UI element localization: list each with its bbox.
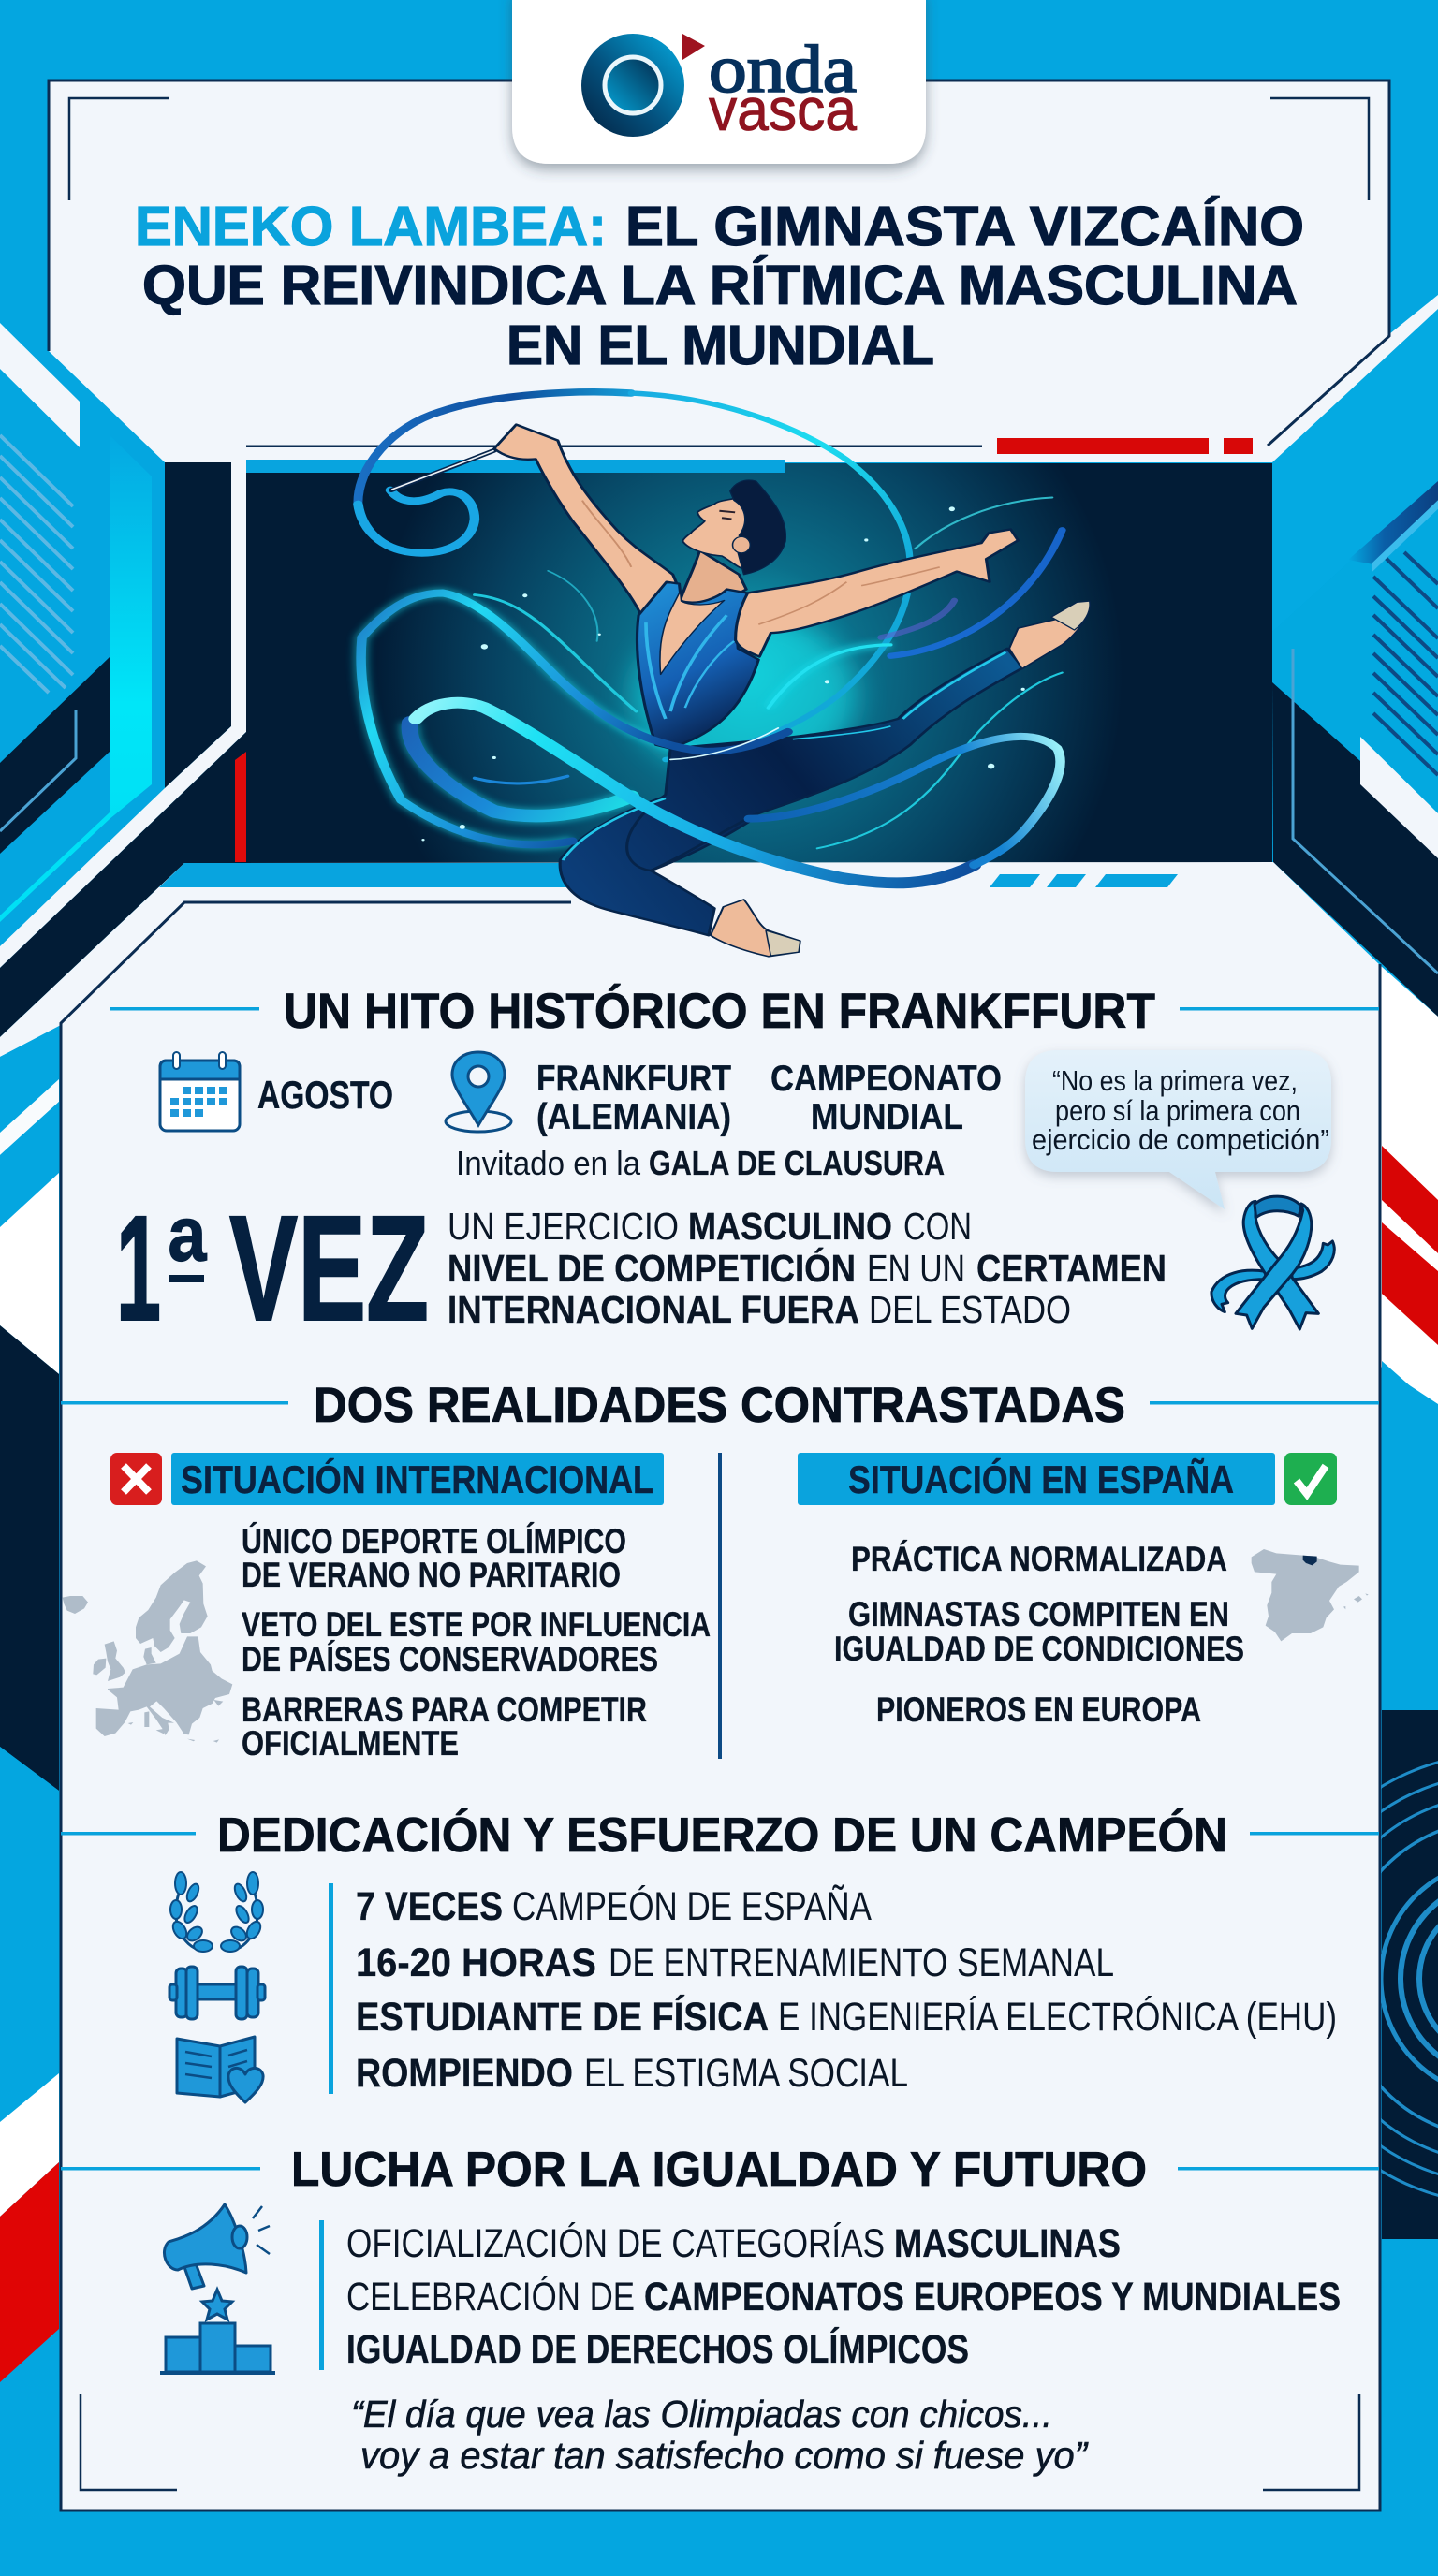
text: dedication list: DE ENTRENAMIENTO SEMANAL bbox=[609, 1940, 1114, 1985]
gymnast with ribbon bbox=[358, 392, 1090, 957]
lower content panel bbox=[0, 862, 1438, 2510]
gymnast body bbox=[494, 425, 1090, 957]
text: first time description: DEL ESTADO bbox=[869, 1288, 1071, 1331]
panel: situación en españa bbox=[798, 1453, 1369, 1729]
icon: calendar bbox=[160, 1052, 240, 1131]
icon: location pin bbox=[446, 1052, 511, 1132]
text: equality list: IGUALDAD DE DERECHOS OLÍMPICOS bbox=[346, 2327, 969, 2372]
bullet list: PRÁCTICA NORMALIZADA bbox=[851, 1540, 1227, 1578]
title: EL GIMNASTA VIZCAÍNO bbox=[625, 196, 1304, 257]
label: agosto: AGOSTO bbox=[257, 1073, 393, 1117]
heading: dos realidades: DOS REALIDADES CONTRASTADAS bbox=[314, 1378, 1125, 1433]
text: first time description: EN UN bbox=[867, 1247, 965, 1290]
callout: speech bubble: pero sí la primera con bbox=[1055, 1094, 1300, 1127]
text: equality list: MASCULINAS bbox=[894, 2221, 1121, 2266]
icon: book with heart bbox=[177, 2037, 263, 2102]
chest skin bbox=[660, 592, 725, 675]
bent leg bbox=[560, 795, 754, 935]
text: first time description: UN EJERCICIO bbox=[448, 1205, 679, 1248]
label: frankfurt: (ALEMANIA) bbox=[536, 1097, 731, 1137]
closing quote: voy a estar tan satisfecho como si fuese yo” bbox=[360, 2434, 1089, 2477]
invited line bbox=[456, 1144, 945, 1182]
bullet list bbox=[242, 1521, 711, 1763]
invited line: Invitado en la bbox=[456, 1144, 641, 1182]
hair bbox=[730, 480, 785, 575]
text: first time description: CERTAMEN bbox=[976, 1247, 1167, 1290]
label: campeonato mundial: CAMPEONATO bbox=[770, 1059, 1002, 1099]
header bar: SITUACIÓN INTERNACIONAL bbox=[181, 1456, 653, 1501]
extended leg bbox=[627, 649, 1023, 871]
ribbon: upper loop bbox=[358, 392, 1062, 848]
big number: 1ª vez: 1 bbox=[116, 1184, 161, 1352]
text: first time description: MASCULINO bbox=[688, 1205, 892, 1248]
label: campeonato mundial bbox=[770, 1059, 1002, 1137]
ribbon glow bbox=[361, 593, 890, 844]
map: europe bbox=[63, 1560, 232, 1743]
outstretched arm bbox=[736, 530, 1018, 657]
bullet list: VETO DEL ESTE POR INFLUENCIA bbox=[242, 1605, 711, 1644]
bullet list: DE PAÍSES CONSERVADORES bbox=[242, 1640, 658, 1678]
left decorative panel bbox=[0, 323, 152, 922]
right edge bands bbox=[1381, 1146, 1438, 2239]
heading: un hito histórico: UN HITO HISTÓRICO EN FRANKFFURT bbox=[284, 983, 1155, 1039]
logo card: vasca bbox=[709, 76, 857, 143]
hero dark band bbox=[0, 438, 1438, 1037]
foot and shoe: bent bbox=[711, 900, 800, 957]
callout: speech bubble bbox=[1025, 1050, 1331, 1209]
dashes bbox=[990, 874, 1178, 887]
bullet list: ÚNICO DEPORTE OLÍMPICO bbox=[242, 1521, 626, 1560]
big number: 1ª vez: ª bbox=[168, 1193, 207, 1333]
bullet list: BARRERAS PARA COMPETIR bbox=[242, 1690, 647, 1729]
text: dedication list: 16-20 HORAS bbox=[356, 1940, 596, 1985]
heading: dos realidades bbox=[61, 1378, 1379, 1433]
icon: red cross bbox=[110, 1453, 162, 1505]
ear bbox=[733, 536, 750, 553]
icon: dumbbell bbox=[169, 1967, 265, 2019]
label: frankfurt: FRANKFURT bbox=[536, 1059, 731, 1099]
big number: 1ª vez: VEZ bbox=[229, 1184, 429, 1352]
heading: lucha bbox=[61, 2143, 1379, 2197]
arm muscle lines bbox=[582, 501, 940, 624]
foot and shoe: extended bbox=[1009, 602, 1090, 669]
bullet list: PIONEROS EN EUROPA bbox=[876, 1690, 1201, 1729]
callout: speech bubble: ejercicio de competición” bbox=[1032, 1123, 1329, 1156]
bullet list: OFICIALMENTE bbox=[242, 1724, 459, 1763]
logo mark bbox=[581, 34, 705, 137]
neck bbox=[681, 550, 746, 604]
face detail bbox=[719, 511, 735, 519]
logo card bbox=[512, 0, 926, 164]
map: spain bbox=[1252, 1549, 1369, 1641]
panel: situación internacional bbox=[63, 1453, 711, 1763]
text: dedication list: 7 VECES bbox=[356, 1884, 503, 1929]
heading: lucha: LUCHA POR LA IGUALDAD Y FUTURO bbox=[291, 2143, 1147, 2197]
text: first time description bbox=[448, 1205, 1167, 1331]
top title panel bbox=[49, 80, 1438, 462]
title bbox=[135, 196, 1304, 376]
bullet list bbox=[834, 1540, 1244, 1729]
text: equality list: OFICIALIZACIÓN DE CATEGORÍAS bbox=[346, 2221, 885, 2266]
text: first time description: NIVEL DE COMPETICIÓN bbox=[448, 1247, 856, 1290]
text: dedication list: ESTUDIANTE DE FÍSICA bbox=[356, 1995, 769, 2040]
text: dedication list bbox=[329, 1883, 1337, 2096]
bullet list: IGUALDAD DE CONDICIONES bbox=[834, 1630, 1244, 1668]
bullet list: DE VERANO NO PARITARIO bbox=[242, 1556, 621, 1594]
callout: speech bubble: “No es la primera vez, bbox=[1052, 1064, 1298, 1097]
text: dedication list: EL ESTIGMA SOCIAL bbox=[584, 2051, 908, 2096]
text: first time description: CON bbox=[903, 1205, 972, 1248]
icon: laurel bbox=[170, 1872, 263, 1952]
tights highlights bbox=[563, 652, 1005, 860]
raised arm bbox=[494, 425, 676, 615]
ribbon: front strands bbox=[361, 593, 1061, 883]
invited line: GALA DE CLAUSURA bbox=[649, 1144, 945, 1182]
sparkles bbox=[421, 506, 1025, 841]
closing quote bbox=[351, 2393, 1089, 2477]
bullet list: GIMNASTAS COMPITEN EN bbox=[848, 1595, 1229, 1633]
icon: podium with star bbox=[160, 2290, 275, 2373]
divider bbox=[718, 1453, 722, 1759]
icon: green check bbox=[1284, 1453, 1337, 1505]
leotard sheen bbox=[646, 615, 734, 719]
right stripes bbox=[1373, 503, 1438, 775]
text: equality list: CELEBRACIÓN DE bbox=[346, 2275, 635, 2320]
icon: megaphone bbox=[164, 2204, 270, 2289]
text: equality list bbox=[319, 2220, 1341, 2372]
torso leotard bbox=[637, 582, 758, 749]
header bar: SITUACIÓN EN ESPAÑA bbox=[848, 1456, 1234, 1501]
big number: 1ª vez bbox=[116, 1184, 429, 1352]
logo card: onda bbox=[709, 32, 857, 107]
icon: ribbon bbox=[1211, 1196, 1334, 1329]
stick bbox=[391, 450, 494, 490]
title: EN EL MUNDIAL bbox=[506, 315, 934, 376]
left edge bands bbox=[0, 1027, 59, 2382]
label: campeonato mundial: MUNDIAL bbox=[811, 1097, 963, 1137]
head bbox=[682, 499, 758, 569]
heading: dedicación: DEDICACIÓN Y ESFUERZO DE UN CAMPEÓN bbox=[217, 1808, 1227, 1863]
text: dedication list: ROMPIENDO bbox=[356, 2051, 573, 2096]
title: ENEKO LAMBEA: bbox=[135, 196, 607, 257]
label: frankfurt bbox=[536, 1059, 731, 1137]
text: dedication list: CAMPEÓN DE ESPAÑA bbox=[512, 1884, 872, 1929]
closing quote: “El día que vea las Olimpiadas con chicos... bbox=[351, 2393, 1052, 2436]
text: first time description: INTERNACIONAL FUERA bbox=[448, 1288, 859, 1331]
title: QUE REIVINDICA LA RÍTMICA MASCULINA bbox=[142, 255, 1298, 316]
